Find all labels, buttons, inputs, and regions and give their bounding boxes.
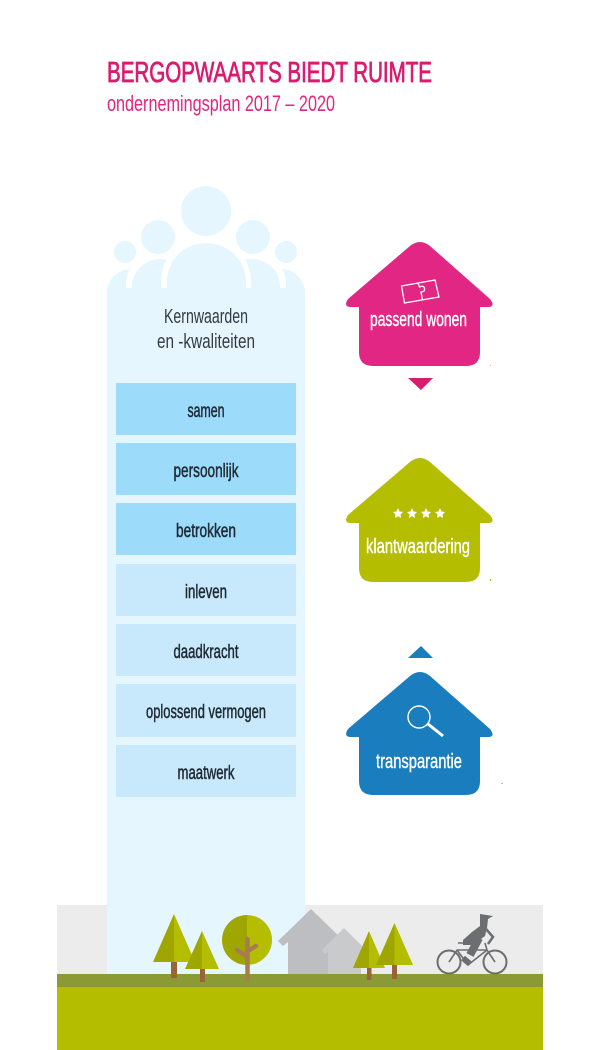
value: oplossend vermogen: oplossend vermogen [146, 702, 266, 723]
icon: magnifier [408, 706, 443, 736]
value: inleven: inleven [185, 582, 227, 603]
icon: puzzle [402, 280, 439, 303]
value: maatwerk: maatwerk [178, 763, 235, 784]
tree 3 [353, 931, 385, 980]
value: daadkracht: daadkracht [174, 642, 239, 663]
tree 1 [153, 914, 195, 978]
icon: four stars [393, 508, 445, 518]
value: inleven [116, 564, 296, 616]
stray dots [490, 365, 503, 784]
title [107, 57, 432, 116]
house: passend wonen: passend wonen [370, 309, 467, 331]
tree 4 [376, 923, 413, 979]
house: passend wonen [346, 242, 493, 366]
arrow: down [408, 378, 433, 390]
value: betrokken: betrokken [176, 521, 236, 542]
value: daadkracht [116, 624, 296, 676]
house: transparantie [346, 672, 493, 795]
house: klantwaardering [346, 458, 493, 582]
column heading: en -kwaliteiten [157, 331, 255, 353]
house: klantwaardering: klantwaardering [366, 536, 470, 558]
tree 2 [185, 931, 219, 982]
houses in landscape [278, 909, 366, 974]
value: oplossend vermogen [116, 684, 296, 737]
house: transparantie: transparantie [376, 751, 462, 773]
value: persoonlijk [116, 443, 296, 495]
arrow: up [408, 646, 433, 658]
ground [57, 974, 543, 1050]
panel: kernwaarden column [107, 186, 305, 975]
title: ondernemingsplan 2017 – 2020 [107, 91, 335, 116]
value: samen [116, 383, 296, 435]
value: betrokken [116, 503, 296, 555]
landscape background [57, 905, 543, 975]
icon: cyclist [438, 914, 506, 974]
title: BERGOPWAARTS BIEDT RUIMTE [107, 57, 432, 89]
value: persoonlijk: persoonlijk [174, 461, 239, 482]
value: maatwerk [116, 745, 296, 797]
column heading: Kernwaarden [164, 306, 248, 328]
value: samen: samen [188, 401, 224, 422]
round tree [222, 915, 272, 979]
icon: group of people [114, 186, 297, 288]
column heading [157, 306, 255, 353]
